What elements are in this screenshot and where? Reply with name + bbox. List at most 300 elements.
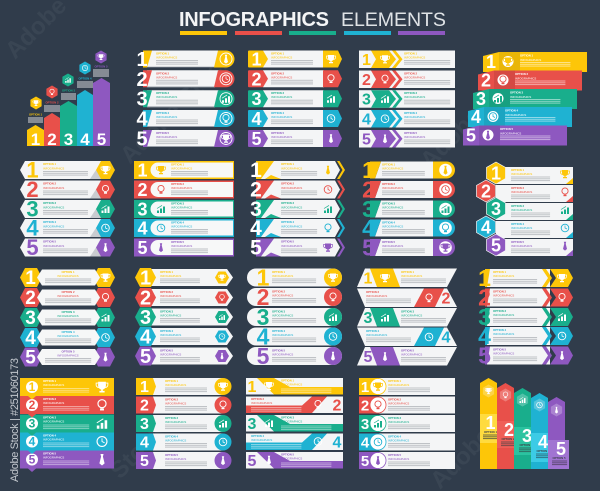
row 4 <box>246 434 343 452</box>
row 2: INFOGRAPHICS <box>515 76 536 80</box>
row 1: INFOGRAPHICS <box>281 166 302 170</box>
row 3: 3 <box>29 417 36 431</box>
row 5 <box>20 450 114 472</box>
row 4: 4 <box>471 107 481 127</box>
row 1: INFOGRAPHICS <box>271 56 292 60</box>
row 2: 2 <box>251 69 262 89</box>
bar 2 <box>44 86 60 149</box>
row 4: INFOGRAPHICS <box>171 224 192 228</box>
row 2: 2 <box>136 69 148 91</box>
row 3: OPTION 3 <box>160 310 173 314</box>
row 3: OPTION 3 <box>61 310 75 314</box>
row 5: INFOGRAPHICS <box>382 244 403 248</box>
row 2: 2 <box>333 398 342 414</box>
row 4 <box>359 434 455 452</box>
row 3: INFOGRAPHICS <box>165 420 186 424</box>
row 2: 2 <box>481 182 491 202</box>
row 2: INFOGRAPHICS <box>160 294 181 298</box>
row 1: INFOGRAPHICS <box>520 58 541 62</box>
row 1 <box>359 378 455 396</box>
row 3: INFOGRAPHICS <box>281 420 302 424</box>
row 4 <box>359 110 455 128</box>
bar 1 <box>27 96 44 149</box>
row 2: INFOGRAPHICS <box>43 186 64 190</box>
row 4 <box>250 217 345 240</box>
row 4: 4 <box>29 435 36 449</box>
row 1: INFOGRAPHICS <box>404 56 425 60</box>
row 4: OPTION 4 <box>505 108 518 112</box>
row 1: 1 <box>362 52 371 69</box>
row 3: INFOGRAPHICS <box>510 95 531 99</box>
row 4: INFOGRAPHICS <box>156 115 177 119</box>
row 2 <box>246 396 343 414</box>
row 5: OPTION 5 <box>493 348 506 352</box>
row 4: OPTION 4 <box>171 220 184 224</box>
row 3: 3 <box>251 89 262 109</box>
row 5: 5 <box>29 453 36 467</box>
row 5: OPTION 5 <box>271 131 284 135</box>
row 2: OPTION 2 <box>43 397 56 401</box>
row 5: INFOGRAPHICS <box>404 135 425 139</box>
row 5 <box>362 234 455 260</box>
row 5: OPTION 5 <box>404 131 417 135</box>
watermark: Adobe Stock <box>115 46 238 169</box>
title: ELEMENTS <box>341 9 446 31</box>
panel: arrow block rows <box>248 50 342 149</box>
row 3 <box>362 196 455 222</box>
row 4: OPTION 4 <box>281 220 294 224</box>
row 5: INFOGRAPHICS <box>281 244 302 248</box>
column 4: 4 <box>538 432 548 452</box>
row 3: 3 <box>361 416 369 433</box>
row 5 <box>20 235 115 260</box>
row 1 <box>246 378 343 396</box>
row 1 <box>136 49 234 71</box>
row 2: INFOGRAPHICS <box>57 294 79 298</box>
row 2: OPTION 2 <box>272 290 285 294</box>
column 4: OPTION 4 <box>536 449 550 453</box>
row 5 <box>20 348 115 368</box>
row 3: OPTION 3 <box>271 91 284 95</box>
row 3: OPTION 3 <box>165 416 178 420</box>
row 3: INFOGRAPHICS <box>160 314 181 318</box>
row 4 <box>476 216 573 238</box>
row 3: INFOGRAPHICS <box>171 206 192 210</box>
row 3 <box>20 196 115 222</box>
row 4: 4 <box>25 328 36 349</box>
row 2: 2 <box>137 180 148 200</box>
row 1 <box>357 268 457 288</box>
row 5 <box>357 347 457 366</box>
row 1 <box>248 50 342 70</box>
row 3: 3 <box>26 196 39 222</box>
row 5: INFOGRAPHICS <box>165 457 186 461</box>
row 5 <box>486 234 573 256</box>
bar 3: 3 <box>64 130 73 149</box>
row 4 <box>362 215 455 241</box>
row 4: INFOGRAPHICS <box>57 334 79 338</box>
watermark: Stock <box>105 418 171 484</box>
row 1: INFOGRAPHICS <box>156 56 177 60</box>
row 2: OPTION 2 <box>160 290 173 294</box>
row 1 <box>483 52 587 72</box>
row 2 <box>250 178 345 202</box>
row 3: 3 <box>140 307 151 329</box>
column 4 <box>531 393 552 469</box>
row 4: INFOGRAPHICS <box>271 115 292 119</box>
row 3 <box>357 308 457 327</box>
row 4: INFOGRAPHICS <box>366 333 387 337</box>
panel: left hexagon arrow rows <box>135 268 233 368</box>
row 4: INFOGRAPHICS <box>404 115 425 119</box>
row 2: OPTION 2 <box>271 71 284 75</box>
row 5: 5 <box>362 132 371 148</box>
row 5: 5 <box>140 346 151 368</box>
row 1: OPTION 1 <box>281 378 294 382</box>
row 2: INFOGRAPHICS <box>156 75 177 79</box>
row 4: 4 <box>140 326 152 348</box>
panel: zigzag parallelogram rows <box>357 268 457 366</box>
row 5 <box>248 129 342 149</box>
row 4: 4 <box>140 434 149 452</box>
row 5 <box>478 342 573 368</box>
row 1: OPTION 1 <box>165 379 178 383</box>
row 4: INFOGRAPHICS <box>272 333 293 337</box>
row 1: 1 <box>140 268 151 290</box>
row 2: INFOGRAPHICS <box>43 401 64 405</box>
row 3: OPTION 3 <box>510 90 523 94</box>
row 3: INFOGRAPHICS <box>388 420 409 424</box>
bar 4 <box>77 62 93 149</box>
row 1: 1 <box>137 160 148 180</box>
row 3: OPTION 3 <box>382 202 395 206</box>
row 4: INFOGRAPHICS <box>382 224 403 228</box>
column 5: OPTION 5 <box>552 456 566 460</box>
row 1: INFOGRAPHICS <box>43 166 64 170</box>
row 3: OPTION 3 <box>404 91 417 95</box>
row 2: OPTION 2 <box>388 398 401 402</box>
row 5: 5 <box>137 238 148 258</box>
row 3 <box>136 415 232 433</box>
row 3 <box>473 89 577 109</box>
row 4: OPTION 4 <box>43 434 56 438</box>
row 1 <box>20 378 114 400</box>
row 1: INFOGRAPHICS <box>43 383 64 387</box>
row 1: 1 <box>251 50 262 70</box>
row 2: OPTION 2 <box>171 182 184 186</box>
row 3: INFOGRAPHICS <box>57 314 79 318</box>
panel: big digit rows with round end <box>362 157 455 260</box>
row 1: 1 <box>491 164 501 184</box>
row 4: OPTION 4 <box>61 330 75 334</box>
row 4: OPTION 4 <box>272 329 285 333</box>
row 3: INFOGRAPHICS <box>281 206 302 210</box>
row 5: INFOGRAPHICS <box>43 244 64 248</box>
row 4: OPTION 4 <box>493 328 506 332</box>
row 3 <box>248 89 342 109</box>
row 2: OPTION 2 <box>366 290 379 294</box>
row 2: INFOGRAPHICS <box>281 186 302 190</box>
row 4: 4 <box>137 218 148 238</box>
row 4: OPTION 4 <box>271 111 284 115</box>
vertical credit: Adobe Stock | #251060173 <box>9 358 21 482</box>
row 4 <box>248 109 342 129</box>
row 1 <box>486 162 573 184</box>
row 5: INFOGRAPHICS <box>271 135 292 139</box>
bar 3: OPTION 3 <box>62 88 75 92</box>
panel: full colour stacked rows <box>20 378 114 472</box>
row 2: 2 <box>140 288 151 310</box>
column 5: 5 <box>556 439 566 459</box>
row 2 <box>247 284 342 310</box>
row 5: 5 <box>257 343 270 369</box>
row 1: OPTION 1 <box>61 270 75 274</box>
row 5: INFOGRAPHICS <box>500 132 521 136</box>
row 1: OPTION 1 <box>388 379 401 383</box>
row 2 <box>136 69 234 91</box>
row 3: INFOGRAPHICS <box>401 314 422 318</box>
row 3: 3 <box>362 196 375 222</box>
row 5: OPTION 5 <box>61 350 75 354</box>
row 2: 2 <box>478 284 491 310</box>
row 5: INFOGRAPHICS <box>171 244 192 248</box>
row 4: INFOGRAPHICS <box>43 224 64 228</box>
row 4: INFOGRAPHICS <box>251 438 272 442</box>
row 2 <box>136 396 232 414</box>
row 2: 2 <box>26 177 39 202</box>
row 5: OPTION 5 <box>511 240 524 244</box>
row 3: 3 <box>257 304 269 330</box>
panel: chevron rows <box>359 50 455 148</box>
row 2: 2 <box>257 284 269 310</box>
row 2: 2 <box>250 178 262 202</box>
row 4: OPTION 4 <box>251 434 264 438</box>
row 2: 2 <box>361 398 369 414</box>
row 5: 5 <box>251 129 262 149</box>
row 2 <box>476 180 573 202</box>
row 5: OPTION 5 <box>43 240 56 244</box>
row 4: INFOGRAPHICS <box>493 332 514 336</box>
row 5: INFOGRAPHICS <box>401 352 422 356</box>
row 4 <box>135 326 233 348</box>
row 2: OPTION 2 <box>281 182 294 186</box>
row 3: OPTION 3 <box>43 416 56 420</box>
row 1: INFOGRAPHICS <box>165 383 186 387</box>
row 3 <box>135 307 233 329</box>
row 1 <box>478 265 573 291</box>
row 4 <box>20 328 115 349</box>
row 1: 1 <box>257 264 270 290</box>
bar 2: 2 <box>47 130 57 149</box>
row 2: OPTION 2 <box>156 71 169 75</box>
row 5 <box>247 343 342 369</box>
column 3: 3 <box>522 426 532 446</box>
row 3: OPTION 3 <box>281 416 294 420</box>
row 3: INFOGRAPHICS <box>382 206 403 210</box>
row 1: OPTION 1 <box>382 162 395 166</box>
row 1: OPTION 1 <box>511 168 524 172</box>
row 1: OPTION 1 <box>272 270 285 274</box>
row 1: OPTION 1 <box>43 162 56 166</box>
row 3: OPTION 3 <box>388 416 401 420</box>
row 4 <box>247 324 342 350</box>
row 2: INFOGRAPHICS <box>366 294 387 298</box>
row 4 <box>134 218 234 238</box>
row 4: 4 <box>251 109 262 129</box>
column 2 <box>497 383 518 469</box>
row 4 <box>136 434 232 452</box>
row 4: INFOGRAPHICS <box>281 224 302 228</box>
row 5: INFOGRAPHICS <box>493 352 514 356</box>
row 2: 2 <box>362 72 371 89</box>
row 1: INFOGRAPHICS <box>281 382 302 386</box>
row 1: 1 <box>486 52 496 72</box>
row 5: OPTION 5 <box>382 240 395 244</box>
bar 5 <box>93 50 110 149</box>
row 1 <box>247 264 342 290</box>
row 4: OPTION 4 <box>165 434 178 438</box>
row 5: INFOGRAPHICS <box>272 352 293 356</box>
row 2 <box>20 177 115 202</box>
panel: staggered hexagon rows <box>476 162 573 256</box>
row 5: 5 <box>361 453 369 470</box>
row 4: 4 <box>257 324 270 350</box>
row 5 <box>250 236 345 260</box>
row 1: 1 <box>140 379 149 396</box>
panel: circle icon badge rows <box>359 378 455 470</box>
bar 3 <box>60 74 77 149</box>
row 3: INFOGRAPHICS <box>156 95 177 99</box>
row 2: INFOGRAPHICS <box>511 190 532 194</box>
row 3: OPTION 3 <box>401 310 414 314</box>
row 5: INFOGRAPHICS <box>160 352 181 356</box>
row 5 <box>359 130 455 148</box>
row 2: OPTION 2 <box>251 397 264 401</box>
row 4: 4 <box>250 217 262 240</box>
row 5: OPTION 5 <box>43 452 56 456</box>
row 2 <box>248 69 342 89</box>
row 3: 3 <box>248 416 257 433</box>
panel: left block with right semicircle rows <box>136 378 232 470</box>
row 2: INFOGRAPHICS <box>382 186 403 190</box>
row 2: 2 <box>442 290 451 308</box>
row 5 <box>463 126 567 146</box>
row 1: 1 <box>361 379 369 396</box>
panel: alternating band rows <box>246 378 343 470</box>
row 5: 5 <box>364 349 373 366</box>
row 4: 4 <box>442 330 451 346</box>
row 1: OPTION 1 <box>156 52 169 56</box>
row 1: INFOGRAPHICS <box>160 274 181 278</box>
row 4: 4 <box>26 216 39 240</box>
row 1: OPTION 1 <box>271 52 284 56</box>
row 4 <box>357 328 457 346</box>
row 5: OPTION 5 <box>160 348 173 352</box>
row 4: INFOGRAPHICS <box>505 113 526 117</box>
bar 4: OPTION 4 <box>78 76 92 80</box>
title colour bars <box>180 31 445 35</box>
row 4: 4 <box>333 434 342 452</box>
row 1 <box>134 160 234 180</box>
row 2 <box>134 180 234 200</box>
row 3 <box>136 89 234 111</box>
row 2 <box>20 396 114 418</box>
row 1: 1 <box>364 270 373 288</box>
row 2: INFOGRAPHICS <box>165 402 186 406</box>
row 4: OPTION 4 <box>43 220 56 224</box>
row 2: OPTION 2 <box>61 290 75 294</box>
bar 1: 1 <box>31 130 40 149</box>
row 4: OPTION 4 <box>156 111 169 115</box>
row 5: OPTION 5 <box>388 453 401 457</box>
row 5: 5 <box>491 236 501 256</box>
bar 1: OPTION 1 <box>29 112 42 116</box>
row 4: OPTION 4 <box>388 434 401 438</box>
row 2 <box>359 396 455 414</box>
row 3: 3 <box>25 308 36 329</box>
row 5 <box>246 452 343 470</box>
row 5: OPTION 5 <box>171 240 184 244</box>
row 1: 1 <box>25 268 36 289</box>
row 1: OPTION 1 <box>493 270 506 274</box>
row 3 <box>20 414 114 436</box>
row 1: INFOGRAPHICS <box>171 166 192 170</box>
row 3 <box>486 198 573 220</box>
column 1: 1 <box>485 413 496 433</box>
row 3: 3 <box>250 198 262 221</box>
row 5: 5 <box>478 342 491 368</box>
row 1: 1 <box>136 49 148 71</box>
row 1: INFOGRAPHICS <box>57 274 79 278</box>
column 2: 2 <box>504 420 514 440</box>
bar 5: 5 <box>97 130 106 149</box>
row 5: 5 <box>26 235 39 260</box>
row 1: OPTION 1 <box>401 270 414 274</box>
row 3: OPTION 3 <box>272 310 285 314</box>
panel: slanted rows with right circle <box>136 49 234 150</box>
row 2: 2 <box>29 398 36 412</box>
row 2: OPTION 2 <box>43 182 56 186</box>
row 4: 4 <box>361 434 370 452</box>
row 1 <box>136 378 232 396</box>
bar 2: OPTION 2 <box>45 100 59 104</box>
row 1: INFOGRAPHICS <box>511 172 532 176</box>
row 5: OPTION 5 <box>272 348 285 352</box>
row 5: 5 <box>136 128 148 150</box>
row 3: OPTION 3 <box>156 91 169 95</box>
row 2: OPTION 2 <box>515 72 528 76</box>
row 2 <box>135 288 233 310</box>
row 3: 3 <box>476 89 486 109</box>
row 1: 1 <box>250 159 262 182</box>
row 1 <box>20 268 115 289</box>
row 2: 2 <box>362 176 375 202</box>
row 1: OPTION 1 <box>171 162 184 166</box>
row 4: INFOGRAPHICS <box>165 438 186 442</box>
row 2: OPTION 2 <box>493 290 506 294</box>
row 4: 4 <box>478 323 491 349</box>
row 5: INFOGRAPHICS <box>511 244 532 248</box>
row 4 <box>136 108 234 130</box>
row 2: 2 <box>481 70 491 90</box>
row 3: 3 <box>364 310 373 327</box>
row 4: INFOGRAPHICS <box>160 333 181 337</box>
row 3: 3 <box>140 416 149 433</box>
bar 5: OPTION 5 <box>94 64 108 68</box>
row 5 <box>136 128 234 150</box>
row 5 <box>136 452 232 470</box>
row 5: OPTION 5 <box>281 240 294 244</box>
